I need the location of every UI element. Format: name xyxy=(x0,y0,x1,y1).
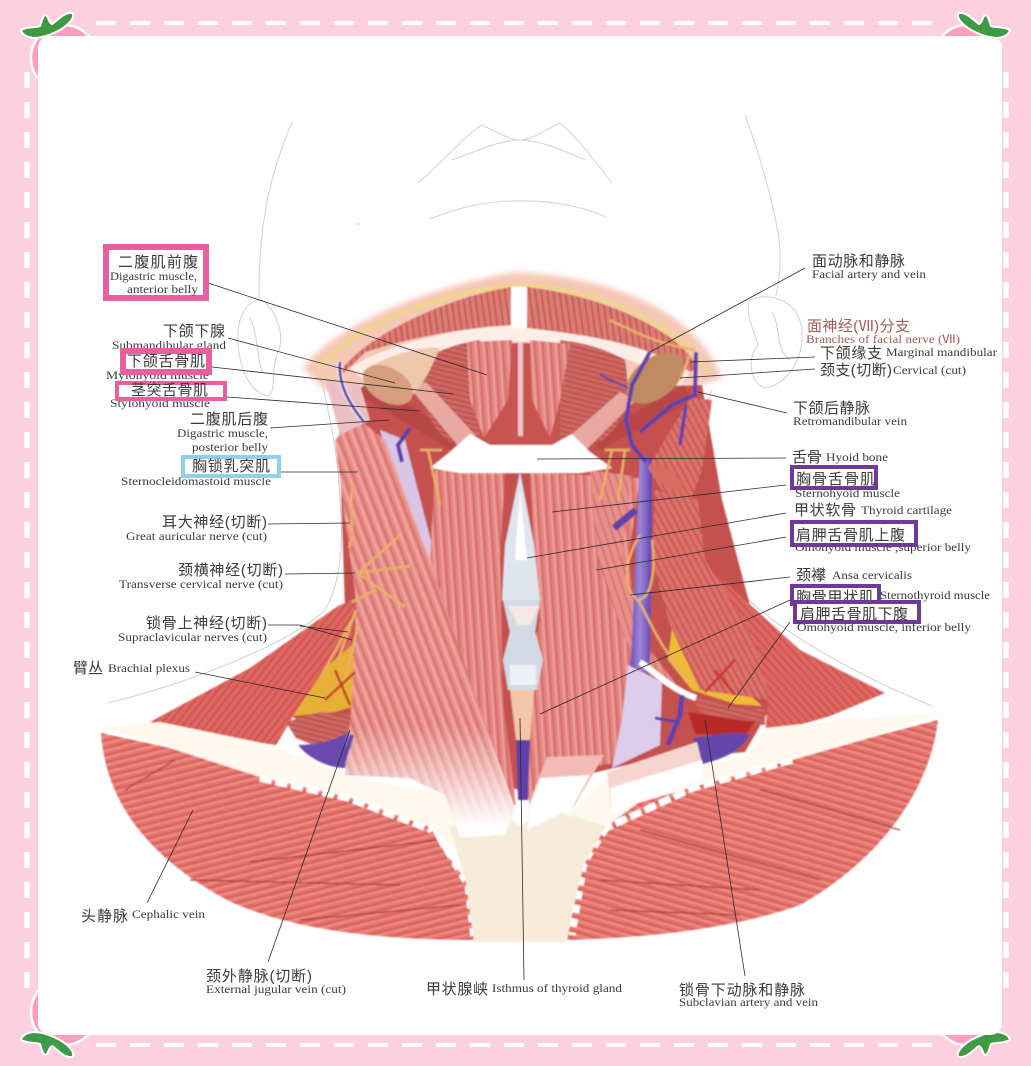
subclavian artery xyxy=(688,712,755,736)
label: mylohyoid: 下颌舌骨肌 xyxy=(127,353,205,370)
pale region near left jaw xyxy=(325,380,370,435)
label: marginal mandibular: Marginal mandibular xyxy=(886,347,997,359)
label: branches of facial nerve: 面神经(Ⅶ)分支 xyxy=(807,318,910,335)
label: stylohyoid: 茎突舌骨肌 xyxy=(131,382,208,399)
omohyoid inferior belly right xyxy=(690,692,765,725)
pectoral muscle right xyxy=(567,720,938,940)
dark pectoral fibres xyxy=(125,760,900,920)
anterior digastric right xyxy=(530,340,570,438)
submandibular gland right xyxy=(617,342,693,414)
label: digastric posterior belly xyxy=(177,411,268,454)
platysma right xyxy=(527,287,698,372)
muscle: left lateral fan xyxy=(150,598,356,745)
anterior digastric left xyxy=(467,340,512,438)
icon: strawberry bottom right xyxy=(934,979,1010,1057)
label: isthmus of thyroid gland: Isthmus of thyroid gland xyxy=(492,983,622,995)
omohyoid inferior belly left xyxy=(286,712,355,747)
label: brachial plexus: 臂丛 xyxy=(73,660,103,677)
white median raphe xyxy=(511,287,527,328)
left dark digastric xyxy=(355,380,460,450)
icon: strawberry bottom left xyxy=(21,979,97,1057)
midline raphe xyxy=(518,342,523,436)
label: submandibular gland xyxy=(112,323,226,352)
label: omohyoid superior belly xyxy=(792,522,971,554)
label: great auricular nerve: 耳大神经(切断) xyxy=(162,514,267,531)
label: sternocleidomastoid: 胸锁乳突肌 xyxy=(192,458,270,475)
label: branches of facial nerve xyxy=(806,318,960,346)
label: retromandibular vein: 下颌后静脉 xyxy=(793,400,870,417)
stylohyoid left xyxy=(410,382,476,448)
muscle: right lower lateral xyxy=(652,490,770,700)
cricoid and trachea xyxy=(503,600,543,690)
label: mylohyoid xyxy=(106,351,209,382)
hyoid bone xyxy=(430,434,612,473)
deep neck muscle base xyxy=(290,385,775,790)
label: thyroid cartilage xyxy=(794,502,952,519)
label: omohyoid inferior belly: Omohyoid muscle, inferior belly xyxy=(797,622,971,634)
label: digastric anterior belly: Digastric muscle, xyxy=(110,271,197,283)
right cut clavicular head xyxy=(607,742,705,815)
label: isthmus of thyroid gland: 甲状腺峡 xyxy=(426,981,488,998)
label: great auricular nerve: Great auricular nerve (cut) xyxy=(126,531,267,543)
label: supraclavicular nerves: 锁骨上神经(切断) xyxy=(146,615,267,632)
subclavian vein left xyxy=(298,730,350,768)
label: supraclavicular nerves xyxy=(118,615,267,644)
label: digastric anterior belly xyxy=(106,247,206,298)
leader lines xyxy=(147,268,815,980)
platysma left xyxy=(338,287,511,378)
muscle: right lateral fan xyxy=(680,560,885,735)
label: omohyoid superior belly: 肩胛舌骨肌上腹 xyxy=(796,527,905,544)
label: digastric posterior belly: Digastric muscle, xyxy=(177,428,268,440)
label: sternocleidomastoid: Sternocleidomastoid muscle xyxy=(121,476,271,488)
submandibular gland left xyxy=(362,348,440,403)
label: transverse cervical nerve xyxy=(119,562,283,591)
lateral lavender fascia xyxy=(380,430,432,575)
sternohyoid right xyxy=(522,472,648,805)
label: facial artery and vein xyxy=(812,253,926,281)
label: brachial plexus: Brachial plexus xyxy=(108,663,191,675)
label: transverse cervical nerve: 颈横神经(切断) xyxy=(178,562,283,579)
label: thyroid cartilage: Thyroid cartilage xyxy=(861,505,952,517)
label: hyoid bone: Hyoid bone xyxy=(826,452,888,464)
white mandible arch xyxy=(350,326,690,385)
label: omohyoid inferior belly xyxy=(795,602,971,634)
right cut sternal head xyxy=(527,755,604,830)
label: submandibular gland: Submandibular gland xyxy=(112,340,226,352)
label: cervical branch: Cervical (cut) xyxy=(893,365,966,377)
label: facial artery and vein: 面动脉和静脉 xyxy=(812,253,905,270)
label: digastric posterior belly: 二腹肌后腹 xyxy=(190,411,268,428)
label: cervical branch: 颈支(切断) xyxy=(820,362,892,379)
right sternocleidomastoid stump xyxy=(648,398,712,502)
label: mylohyoid: Mylohyoid muscle xyxy=(106,370,209,382)
icon: strawberry top left xyxy=(21,13,97,91)
label: omohyoid inferior belly: 肩胛舌骨肌下腹 xyxy=(800,606,908,623)
lavender fascia right xyxy=(612,665,662,768)
veins right xyxy=(344,352,696,760)
label: transverse cervical nerve: Transverse cervical nerve (cut) xyxy=(119,579,283,591)
label: sternohyoid: Sternohyoid muscle xyxy=(795,488,900,500)
label: great auricular nerve xyxy=(126,514,267,543)
sternocleidomastoid left xyxy=(335,418,515,838)
label: submandibular gland: 下颌下腺 xyxy=(163,323,225,340)
label: retromandibular vein: Retromandibular vein xyxy=(793,416,907,428)
label: facial artery and vein: Facial artery and vein xyxy=(812,269,926,281)
brachial plexus vessels xyxy=(325,660,735,705)
label: external jugular vein xyxy=(206,968,346,996)
omohyoid tendon xyxy=(640,662,696,698)
label: subclavian artery and vein xyxy=(679,982,818,1009)
label: hyoid bone xyxy=(792,449,888,466)
label: cephalic vein: Cephalic vein xyxy=(132,909,205,921)
anatomy illustration xyxy=(101,272,940,942)
right dark digastric xyxy=(590,385,694,450)
label: subclavian artery and vein: Subclavian artery and vein xyxy=(679,997,818,1009)
label: brachial plexus xyxy=(73,660,191,677)
label: thyroid cartilage: 甲状软骨 xyxy=(794,502,856,519)
label: sternohyoid: 胸骨舌骨肌 xyxy=(796,471,875,488)
mylohyoid fibres xyxy=(420,340,627,442)
facial vein left xyxy=(340,362,364,422)
label: external jugular vein: 颈外静脉(切断) xyxy=(206,968,312,985)
sternal cream area xyxy=(450,808,606,942)
label: sternocleidomastoid xyxy=(121,457,279,488)
mandibular yellow edge xyxy=(318,285,708,372)
label: sternothyroid: 胸骨甲状肌 xyxy=(796,589,874,606)
label: cervical branch xyxy=(820,362,966,379)
white fringe of pectorals xyxy=(260,760,792,938)
label: cephalic vein: 头静脉 xyxy=(81,908,128,925)
label: cephalic vein xyxy=(81,908,205,925)
label: digastric posterior belly: posterior belly xyxy=(192,442,268,454)
head and neck contour lines xyxy=(108,115,932,706)
label: supraclavicular nerves: Supraclavicular nerves (cut) xyxy=(118,632,267,644)
floor of mouth xyxy=(420,343,627,442)
white clavicle band left xyxy=(101,722,512,860)
label: omohyoid superior belly: Omohyoid muscle ,superior belly xyxy=(795,542,971,554)
fat pad right xyxy=(668,628,762,706)
label: ansa cervicalis: 颈襻 xyxy=(796,567,826,584)
label: ansa cervicalis: Ansa cervicalis xyxy=(832,570,913,582)
label: marginal mandibular: 下颌缘支 xyxy=(820,345,882,362)
label: marginal mandibular xyxy=(820,345,997,362)
internal jugular vein xyxy=(628,455,652,700)
label: digastric anterior belly: 二腹肌前腹 xyxy=(118,254,198,271)
skin margin of the jaw xyxy=(303,272,722,390)
label: isthmus of thyroid gland xyxy=(426,981,622,998)
label: external jugular vein: External jugular vein (cut) xyxy=(206,984,346,996)
stylohyoid right xyxy=(570,392,636,450)
label: stylohyoid: Stylohyoid muscle xyxy=(110,398,210,410)
label: sternohyoid xyxy=(792,467,900,500)
fat pad left xyxy=(293,640,358,716)
label: stylohyoid xyxy=(110,382,225,410)
label: branches of facial nerve: Branches of facial nerve (Ⅶ) xyxy=(806,334,960,346)
label: sternothyroid: Sternothyroid muscle xyxy=(880,590,990,602)
nerves orange xyxy=(322,320,695,680)
label: ansa cervicalis xyxy=(796,567,913,584)
omohyoid superior belly xyxy=(590,470,682,692)
label: retromandibular vein xyxy=(793,400,907,428)
icon: strawberry top right xyxy=(934,13,1010,91)
label: subclavian artery and vein: 锁骨下动脉和静脉 xyxy=(679,982,805,999)
thyroid isthmus xyxy=(510,690,534,740)
thyroid cartilage xyxy=(502,472,540,600)
pectoral muscle left xyxy=(101,733,474,940)
label: digastric anterior belly: anterior belly xyxy=(127,284,198,296)
external vein left xyxy=(398,428,410,462)
label: hyoid bone: 舌骨 xyxy=(792,449,822,466)
label: sternothyroid xyxy=(792,586,990,606)
white clavicle band right xyxy=(555,713,940,835)
sternohyoid left xyxy=(430,470,516,805)
inferior thyroid veins xyxy=(516,740,530,800)
subclavian vein right xyxy=(693,733,750,765)
